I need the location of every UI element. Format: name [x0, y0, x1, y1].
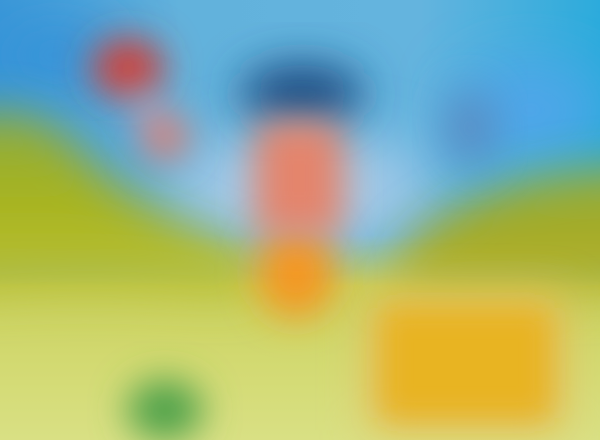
figure: pink body [254, 120, 344, 236]
figure: hair [240, 64, 364, 124]
red balloon [92, 38, 164, 98]
right hill [385, 165, 600, 296]
left hill [0, 111, 255, 295]
ground [0, 235, 600, 440]
figure [240, 64, 364, 318]
yellow panel: warm halo [368, 296, 564, 430]
yellow panel [368, 296, 564, 430]
figure: orange skirt [256, 226, 336, 318]
balloon string and small pink balloon [135, 95, 188, 160]
green bush [127, 380, 203, 440]
yellow panel: core [382, 308, 550, 418]
distant blue shape [446, 90, 494, 166]
